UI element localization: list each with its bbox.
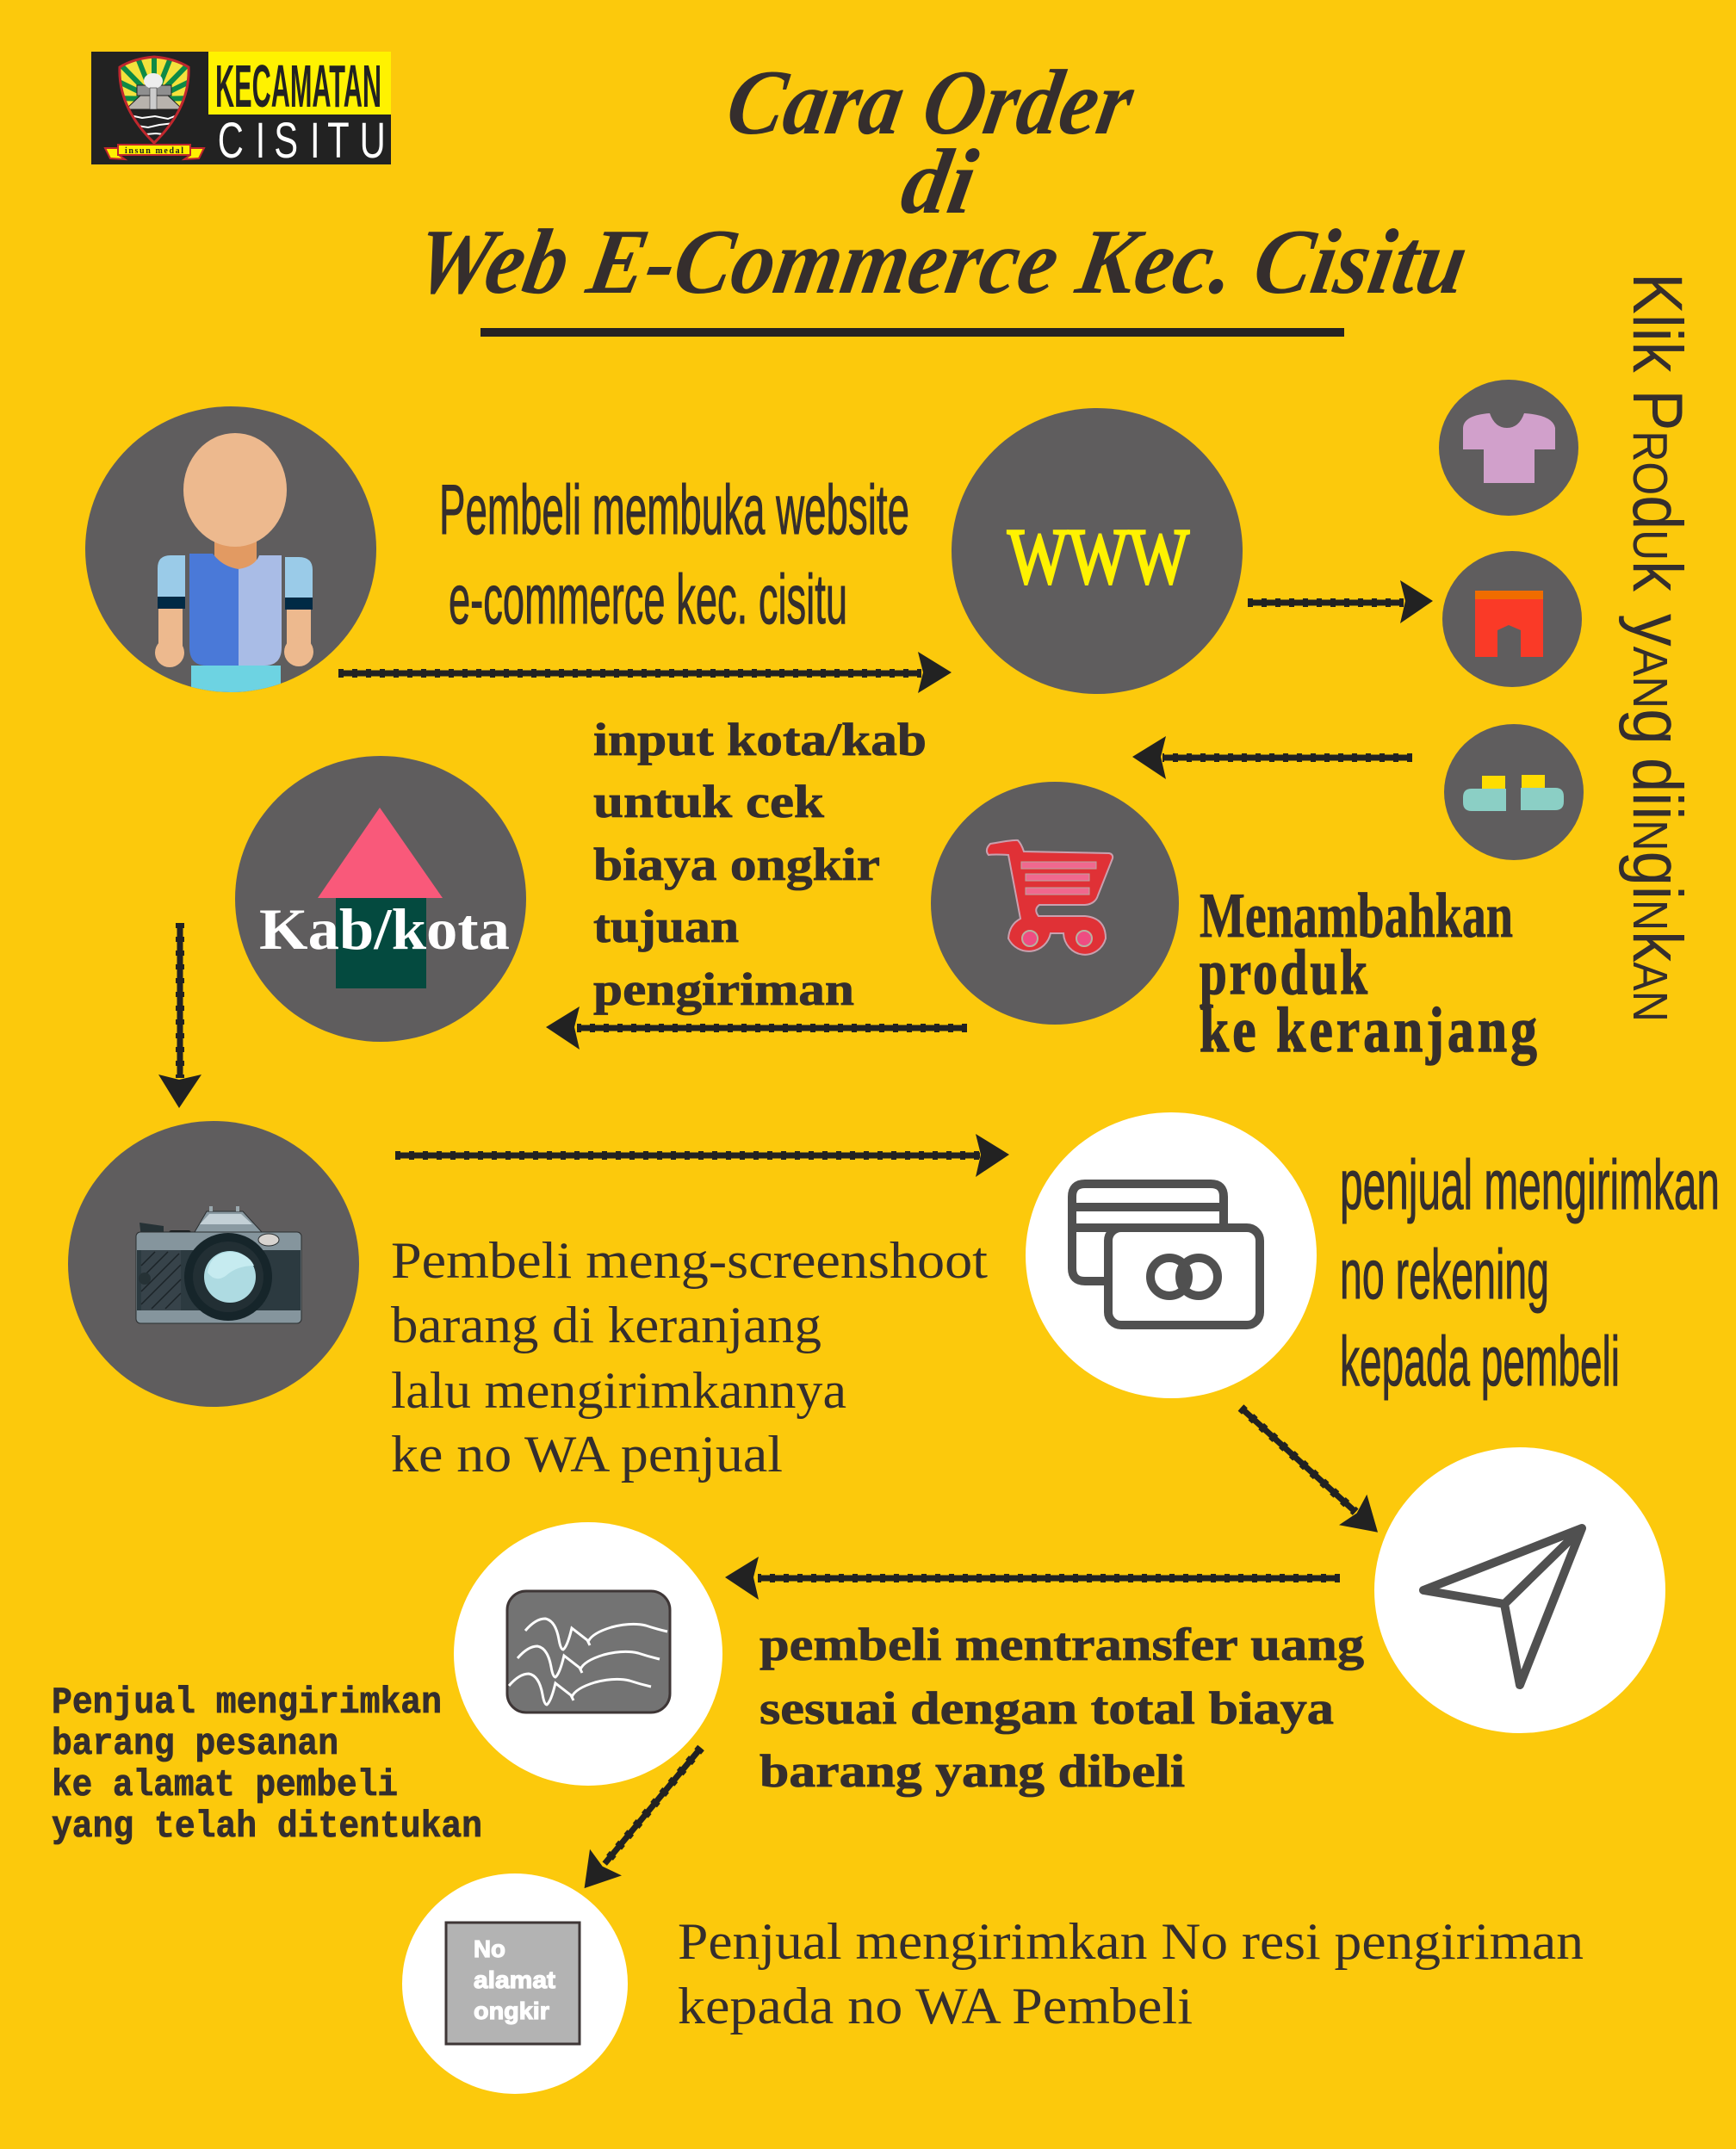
panel: no alamat ongkir: ongkir: [474, 1997, 549, 2024]
text: add product to cart: produk: [1200, 938, 1370, 1008]
text: seller sends receipt number: kepada no WA Pembeli: [678, 1978, 1193, 2034]
text: input city: input kota/kab: [593, 714, 927, 765]
arrow: products to cart: [1132, 736, 1412, 779]
panel: buyer figure: [85, 406, 376, 696]
arrow: send to parcel: [725, 1557, 1340, 1600]
title underline: [480, 328, 1344, 337]
text: seller sends receipt number: Penjual mengirimkan No resi pengiriman: [678, 1913, 1584, 1970]
text: input city: tujuan: [593, 901, 739, 952]
text: seller ships: ke alamat pembeli: [52, 1764, 398, 1807]
text: buyer transfers: pembeli mentransfer uang: [760, 1619, 1364, 1670]
text: buyer opens website: [439, 471, 909, 639]
text: seller sends account number: no rekening: [1340, 1236, 1549, 1314]
vertical text: click desired product: yang: [1618, 614, 1696, 745]
infographic: KECAMATAN: [215, 53, 381, 120]
panel: kab/kota house: Kab/kota: [259, 896, 510, 962]
text: seller ships: barang pesanan: [52, 1723, 338, 1766]
vertical text: click desired product: [1618, 273, 1696, 1022]
text: seller ships: yang telah ditentukan: [52, 1805, 482, 1849]
arrow: to products: [1248, 580, 1433, 623]
text: add product to cart: ke keranjang: [1200, 995, 1541, 1066]
text: seller ships: Penjual mengirimkan: [52, 1681, 442, 1725]
panel: parcel note: [454, 1522, 722, 1786]
panel: no alamat ongkir: [402, 1873, 628, 2094]
arrow: card to send: [1227, 1392, 1392, 1547]
text: screenshot: ke no WA penjual: [391, 1426, 783, 1483]
icon: shorts: [1442, 551, 1582, 687]
logo: Kecamatan Cisitu: insun medal: [125, 146, 183, 156]
vertical text: click desired product: diinginkan: [1618, 758, 1696, 1022]
icon: t-shirt: [1439, 380, 1578, 516]
text: input city: biaya ongkir: [593, 839, 880, 890]
text: add product to cart: [1200, 881, 1541, 1066]
title: Cara Order: [720, 51, 1142, 154]
text: input city: untuk cek: [593, 776, 824, 827]
arrow: kab/kota to camera: [158, 923, 202, 1108]
arrow: parcel to receipt: [568, 1735, 716, 1901]
panel: no alamat ongkir: alamat: [474, 1966, 555, 1993]
title: [408, 51, 1475, 313]
text: seller ships: [52, 1681, 482, 1849]
text: seller sends account number: [1340, 1146, 1720, 1401]
panel: send icon: [1374, 1447, 1665, 1733]
text: add product to cart: Menambahkan: [1200, 881, 1513, 951]
text: screenshot: Pembeli meng-screenshoot: [391, 1232, 988, 1289]
panel: camera: [68, 1121, 359, 1407]
text: input city: [593, 714, 927, 1015]
panel: www: WWW: [1008, 512, 1189, 600]
panel: kab/kota house: [235, 756, 526, 1042]
text: buyer opens website: e-commerce kec. cisitu: [449, 560, 847, 639]
arrow: camera to card: [395, 1134, 1009, 1177]
text: buyer transfers: sesuai dengan total biaya: [760, 1682, 1334, 1734]
text: buyer opens website: Pembeli membuka website: [439, 471, 909, 549]
arrow: to website: [338, 652, 952, 693]
vertical text: click desired product: Klik Produk: [1618, 273, 1696, 592]
text: screenshot: lalu mengirimkannya: [391, 1362, 846, 1419]
text: input city: pengiriman: [593, 963, 854, 1015]
title: Web E-Commerce Kec. Cisitu: [408, 210, 1475, 313]
text: screenshot: [391, 1232, 988, 1483]
text: screenshot: barang di keranjang: [391, 1297, 822, 1353]
text: buyer transfers: [760, 1619, 1364, 1797]
text: seller sends receipt number: [678, 1913, 1584, 2034]
icon: shoes: [1444, 724, 1584, 860]
logo: Kecamatan Cisitu: CISITU: [218, 112, 386, 169]
arrow: cart to kab/kota: [546, 1006, 967, 1050]
panel: cart: [931, 782, 1179, 1025]
logo: Kecamatan Cisitu: [91, 52, 391, 169]
title: di: [895, 130, 984, 233]
panel: www: [952, 408, 1243, 694]
panel: no alamat ongkir: No: [474, 1935, 505, 1962]
text: buyer transfers: barang yang dibeli: [760, 1745, 1185, 1797]
panel: credit card: [1026, 1112, 1317, 1398]
